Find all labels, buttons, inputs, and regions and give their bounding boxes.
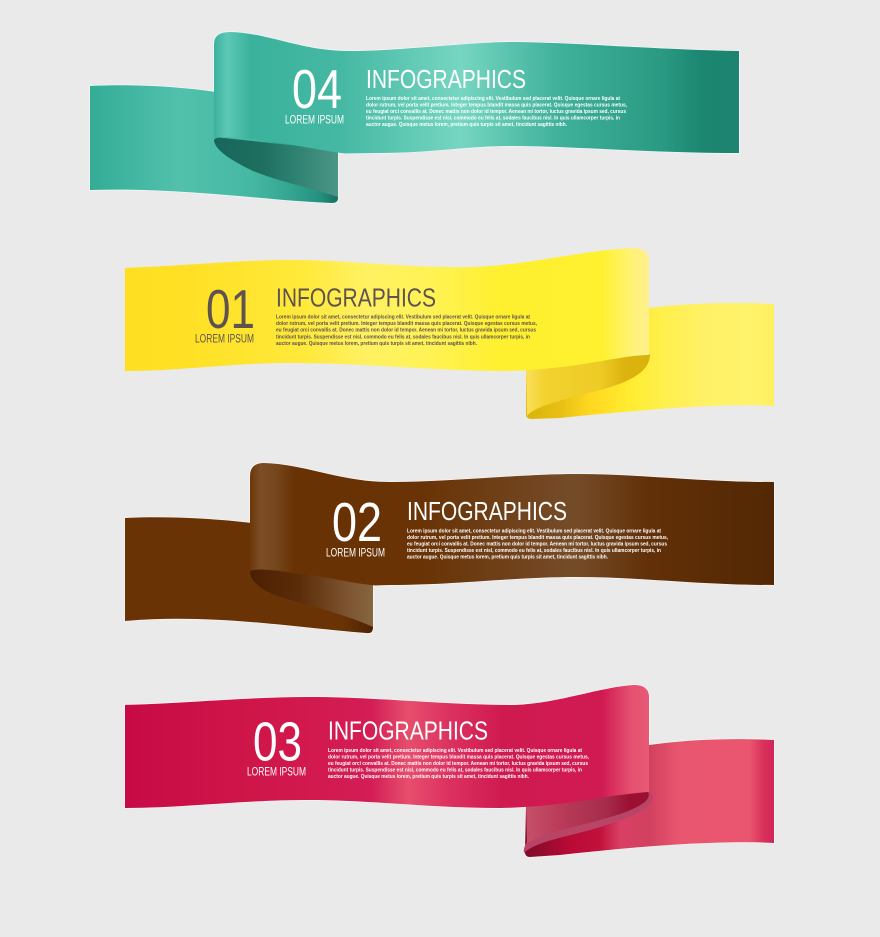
body text: Lorem ipsum dolor sit amet, consectetur adipiscing elit. Vestibulum sed placerat velit. Quisque ornare ligula at bbox=[328, 748, 582, 754]
ribbon tail bbox=[525, 739, 774, 857]
body text: auctor augue. Quisque metus lorem, pretium quis turpis sit amet, tincidunt sagittis nibh. bbox=[276, 341, 477, 347]
body text: auctor augue. Quisque metus lorem, pretium quis turpis sit amet, tincidunt sagittis nibh. bbox=[328, 774, 529, 780]
ribbon white outline bbox=[90, 32, 739, 203]
body text: tincidunt turpis. Suspendisse est nisl, commodo eu felis at, sodales faucibus nisl. In quis ullamcorper turpis, in bbox=[366, 116, 620, 122]
body text: dolor rutrum, vel porta velit pretium. Integer tempus blandit massa quis placerat. Quisque egestas cursus metus, bbox=[407, 535, 668, 541]
body text: eu feugiat orci convallis at. Donec mattis non dolor id tempor. Aenean mi tortor, luctus gravida ipsum sed, cursus bbox=[328, 761, 588, 767]
label lorem ipsum: LOREM IPSUM bbox=[195, 334, 254, 346]
ribbon white outline bbox=[125, 463, 774, 633]
body text: auctor augue. Quisque metus lorem, pretium quis turpis sit amet, tincidunt sagittis nibh. bbox=[366, 122, 567, 128]
body text: eu feugiat orci convallis at. Donec mattis non dolor id tempor. Aenean mi tortor, luctus gravida ipsum sed, cursus bbox=[276, 328, 536, 334]
ribbon front bbox=[125, 248, 649, 371]
ribbon inner fold bbox=[250, 568, 373, 627]
ribbon inner fold bbox=[526, 792, 649, 843]
body text: dolor rutrum, vel porta velit pretium. Integer tempus blandit massa quis placerat. Quisque egestas cursus metus, bbox=[366, 102, 627, 108]
number 03: 03 bbox=[253, 710, 302, 772]
body text: tincidunt turpis. Suspendisse est nisl, commodo eu felis at, sodales faucibus nisl. In quis ullamcorper turpis, in bbox=[328, 768, 582, 774]
ribbon front bbox=[125, 685, 649, 808]
panel: ribbon 02 brown bbox=[125, 463, 774, 633]
number 01: 01 bbox=[206, 278, 255, 340]
body text bbox=[407, 528, 668, 560]
body text: Lorem ipsum dolor sit amet, consectetur adipiscing elit. Vestibulum sed placerat velit. Quisque ornare ligula at bbox=[407, 528, 661, 534]
body text: dolor rutrum, vel porta velit pretium. Integer tempus blandit massa quis placerat. Quisque egestas cursus metus, bbox=[328, 754, 589, 760]
ribbon inner fold lip bbox=[524, 791, 652, 853]
body text: eu feugiat orci convallis at. Donec mattis non dolor id tempor. Aenean mi tortor, luctus gravida ipsum sed, cursus bbox=[366, 109, 626, 115]
ribbon tail bbox=[125, 517, 373, 633]
label lorem ipsum: LOREM IPSUM bbox=[247, 767, 306, 779]
body text bbox=[328, 748, 589, 780]
panel: ribbon 04 teal bbox=[90, 32, 739, 203]
panel: ribbon 01 yellow bbox=[125, 248, 774, 419]
number 02: 02 bbox=[332, 491, 382, 553]
ribbon tail bbox=[90, 85, 338, 203]
heading: INFOGRAPHICS bbox=[276, 282, 436, 312]
heading: INFOGRAPHICS bbox=[328, 715, 488, 745]
body text bbox=[366, 96, 627, 128]
panel: ribbon 03 crimson bbox=[125, 685, 774, 857]
body text: tincidunt turpis. Suspendisse est nisl, commodo eu felis at, sodales faucibus nisl. In quis ullamcorper turpis, in bbox=[276, 334, 530, 340]
body text: auctor augue. Quisque metus lorem, pretium quis turpis sit amet, tincidunt sagittis nibh. bbox=[407, 554, 608, 560]
body text: Lorem ipsum dolor sit amet, consectetur adipiscing elit. Vestibulum sed placerat velit. Quisque ornare ligula at bbox=[276, 314, 530, 320]
number 04: 04 bbox=[292, 58, 342, 120]
label lorem ipsum: LOREM IPSUM bbox=[285, 114, 344, 126]
ribbon front bbox=[250, 463, 774, 586]
heading: INFOGRAPHICS bbox=[366, 64, 526, 94]
ribbon inner fold bbox=[214, 137, 338, 197]
ribbon front bbox=[214, 32, 739, 154]
ribbon inner fold bbox=[526, 354, 650, 416]
body text: Lorem ipsum dolor sit amet, consectetur adipiscing elit. Vestibulum sed placerat velit. Quisque ornare ligula at bbox=[366, 96, 620, 102]
body text: eu feugiat orci convallis at. Donec mattis non dolor id tempor. Aenean mi tortor, luctus gravida ipsum sed, cursus bbox=[407, 542, 667, 548]
body text bbox=[276, 314, 537, 347]
heading: INFOGRAPHICS bbox=[407, 496, 567, 526]
body text: dolor rutrum, vel porta velit pretium. Integer tempus blandit massa quis placerat. Quisque egestas cursus metus, bbox=[276, 321, 537, 327]
label lorem ipsum: LOREM IPSUM bbox=[326, 548, 385, 560]
body text: tincidunt turpis. Suspendisse est nisl, commodo eu felis at, sodales faucibus nisl. In quis ullamcorper turpis, in bbox=[407, 548, 661, 554]
ribbon tail bbox=[526, 303, 774, 419]
ribbon white outline bbox=[125, 685, 774, 857]
